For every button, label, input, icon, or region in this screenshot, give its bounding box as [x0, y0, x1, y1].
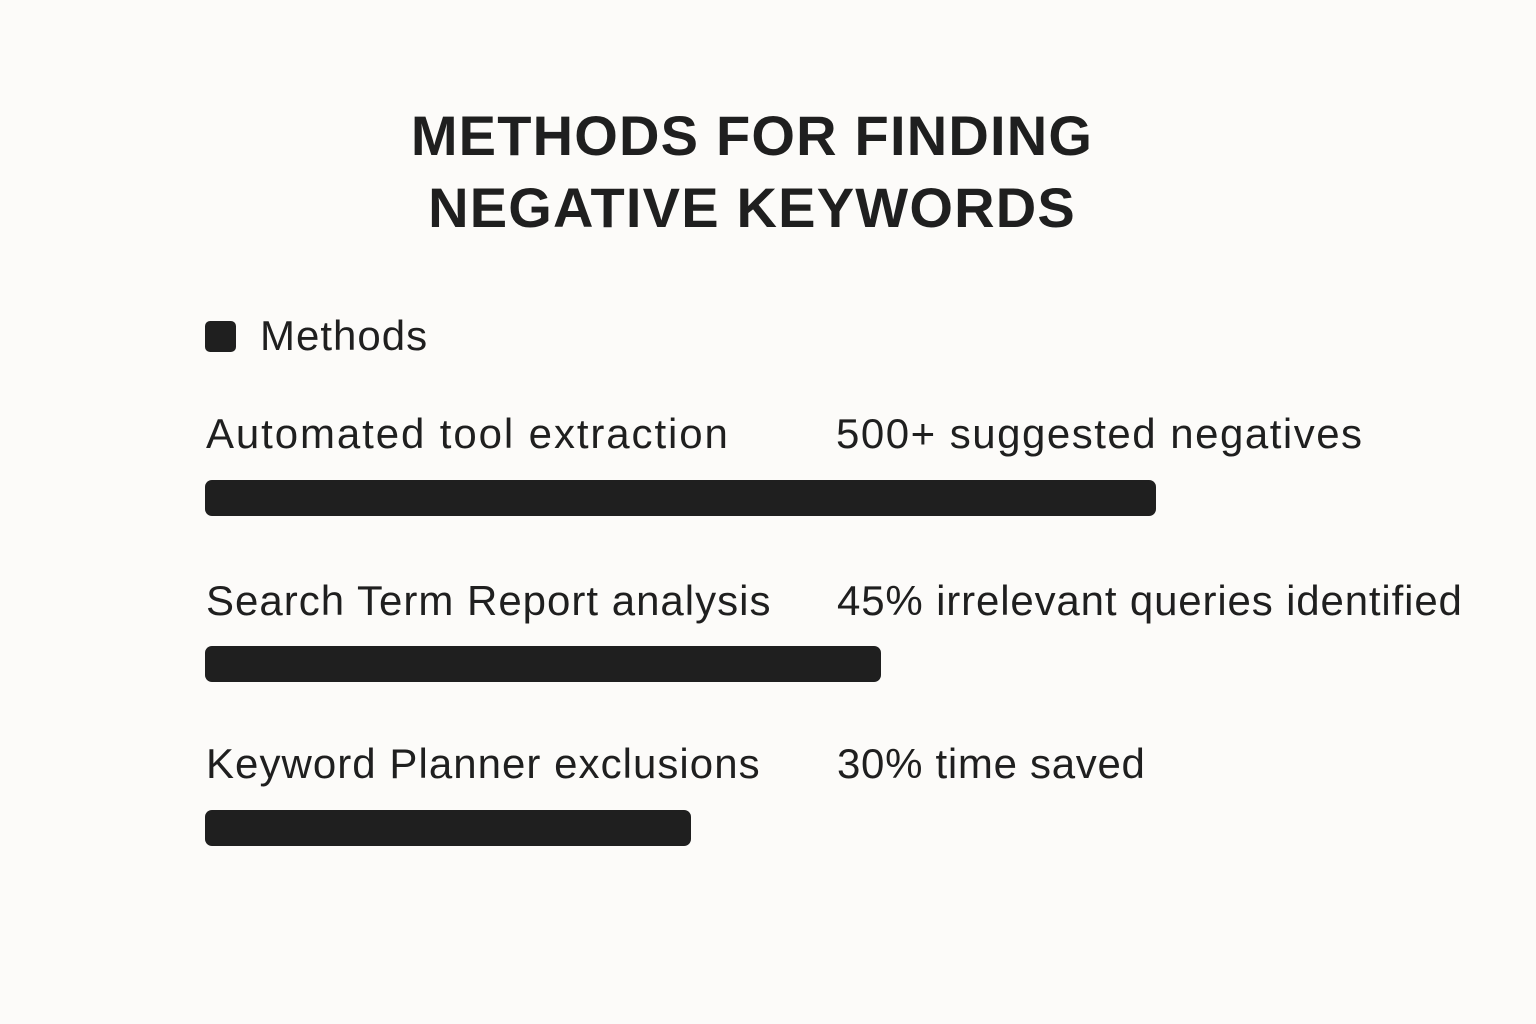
title: [411, 104, 1093, 239]
legend: Methods: [260, 312, 428, 359]
bar: keyword planner: [205, 810, 691, 846]
title: NEGATIVE KEYWORDS: [428, 176, 1076, 239]
label: keyword planner: Keyword Planner exclusions: [206, 740, 761, 787]
value: automated: 500+ suggested negatives: [836, 410, 1364, 457]
value: keyword planner: 30% time saved: [837, 740, 1146, 787]
label: automated: Automated tool extraction: [206, 410, 730, 457]
value: search term: 45% irrelevant queries identified: [837, 577, 1463, 624]
bar: search term: [205, 646, 881, 682]
title: METHODS FOR FINDING: [411, 104, 1093, 167]
label: search term: Search Term Report analysis: [206, 577, 771, 624]
bar: automated: [205, 480, 1156, 516]
